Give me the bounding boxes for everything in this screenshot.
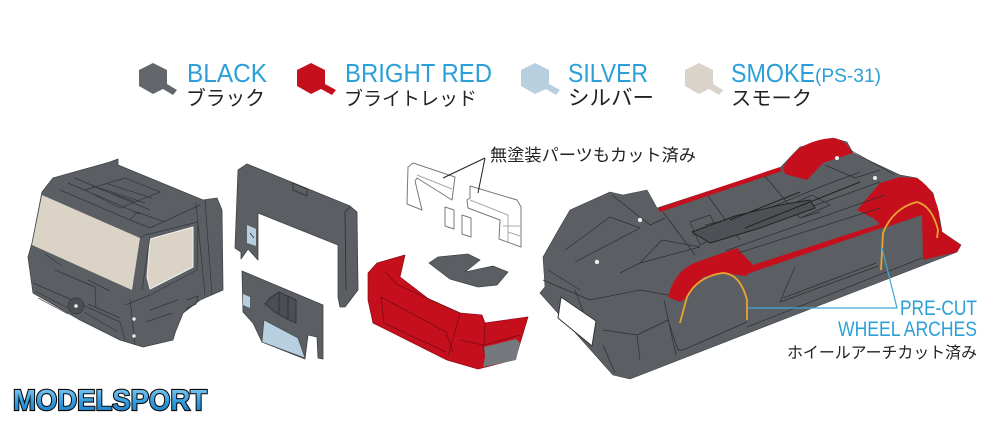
grey mat part	[429, 254, 508, 287]
side window	[147, 227, 193, 289]
lower interior panel	[242, 271, 323, 359]
truck chassis body	[540, 138, 961, 379]
legend item: bright red: BRIGHT RED	[345, 58, 492, 88]
truck cab	[28, 159, 223, 347]
bumper grey end	[483, 339, 520, 367]
red lower side strip	[747, 223, 893, 274]
legend item: smoke: スモーク	[731, 87, 812, 110]
silver heat shield	[262, 320, 305, 358]
orange front wheel arch cut line	[680, 273, 747, 323]
label: unpainted parts also pre-cut: 無塗装パーツもカット済み	[490, 146, 696, 165]
central chassis mechanism	[692, 182, 860, 243]
red front arch	[668, 248, 753, 302]
white lamp panel	[558, 297, 596, 346]
red rear wheel arch back	[783, 138, 853, 180]
legend item: bright red	[297, 58, 492, 110]
red rear arch	[857, 177, 961, 260]
legend item: bright red: ブライトレッド	[344, 87, 477, 110]
legend item: smoke: (PS-31)	[815, 66, 881, 87]
red front bumper	[368, 255, 528, 369]
legend item: smoke	[685, 58, 881, 110]
unpainted clear parts	[407, 163, 521, 247]
body silhouette with base plate	[540, 138, 961, 379]
windshield	[32, 195, 140, 290]
logo: Modelsport: MODELSPORT	[13, 385, 207, 417]
callout: pre-cut wheel arches: WHEEL ARCHES	[838, 318, 977, 341]
legend: paint colours	[139, 58, 881, 110]
cab detail lines	[33, 178, 212, 345]
legend item: silver: SILVER	[568, 58, 648, 88]
orange rear wheel arch cut line	[881, 202, 938, 270]
leader lines: unpainted parts	[443, 158, 485, 193]
callout: pre-cut wheel arches	[787, 297, 977, 362]
callout: pre-cut wheel arches: ホイールアーチカット済み	[787, 344, 977, 362]
legend item: silver: シルバー	[568, 87, 654, 110]
upper interior panel	[235, 164, 358, 307]
callout: pre-cut wheel arches: PRE-CUT	[900, 297, 977, 320]
legend item: silver	[521, 58, 654, 110]
leader lines: wheel arches	[748, 248, 897, 308]
legend item: black: ブラック	[186, 86, 265, 110]
legend item: black: BLACK	[187, 58, 268, 88]
legend item: black	[139, 58, 268, 110]
red side strip	[658, 167, 782, 212]
legend item: smoke: SMOKE	[731, 58, 815, 88]
chassis interior detail lines	[543, 150, 922, 373]
